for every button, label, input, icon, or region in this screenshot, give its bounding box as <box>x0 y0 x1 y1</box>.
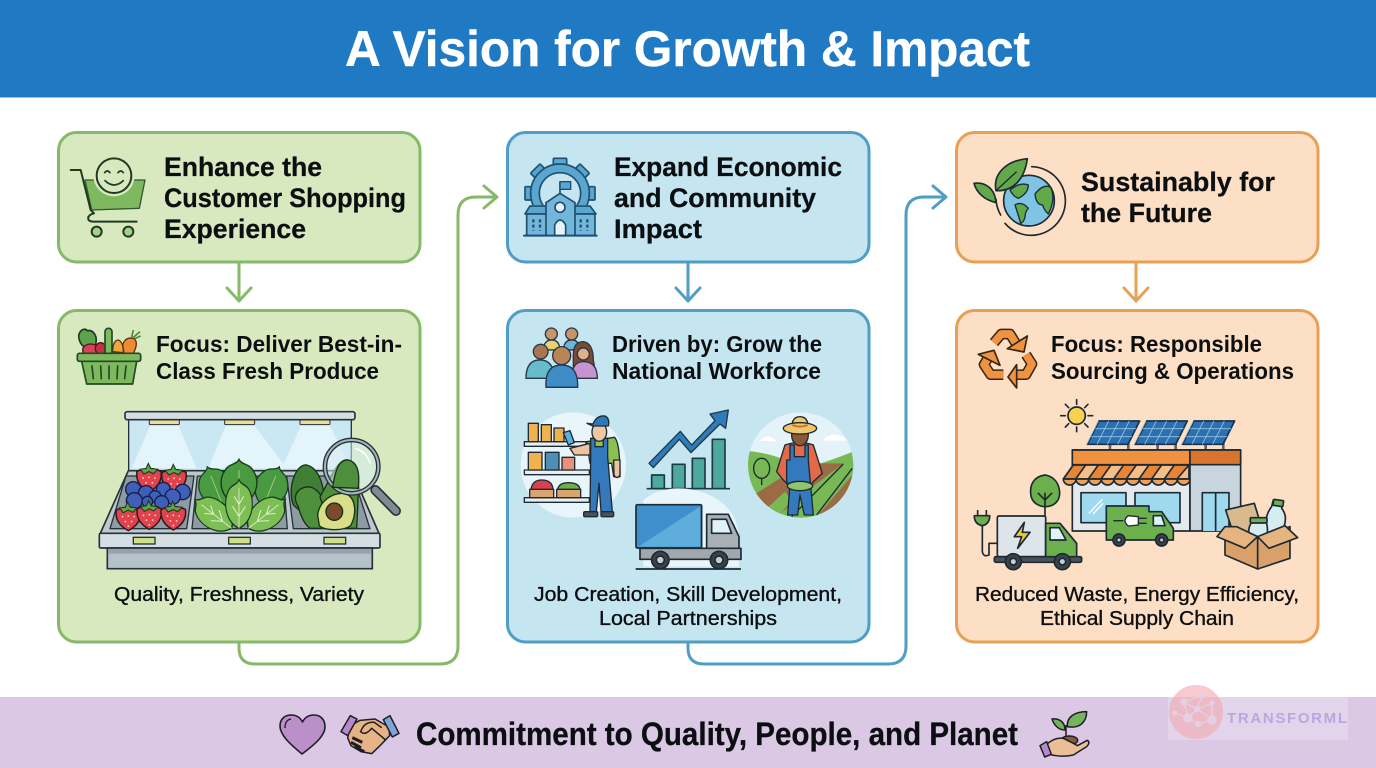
subheading: driven by: National Workforce <box>612 358 821 384</box>
solar panels <box>1087 421 1235 450</box>
caption: responsible: Ethical Supply Chain <box>1040 608 1234 630</box>
heading: enhance: Enhance the <box>164 152 322 182</box>
icon: hand holding seedling <box>1040 712 1089 757</box>
icon: heart <box>280 715 325 754</box>
sun <box>1061 400 1093 432</box>
heading: enhance: Experience <box>164 214 306 244</box>
caption: quality: Quality, Freshness, Variety <box>114 584 364 606</box>
shelf worker <box>521 412 626 518</box>
heading: expand: and Community <box>614 183 816 213</box>
heading: expand: Impact <box>614 214 702 244</box>
subheading: focus responsible <box>1051 331 1294 384</box>
heading: sustainably: Sustainably for <box>1081 167 1275 197</box>
subheading: focus produce: Class Fresh Produce <box>156 358 379 384</box>
panel: enhance customer experience <box>58 132 420 262</box>
icon: produce basket <box>77 328 141 384</box>
strawberries and blueberries <box>116 463 190 531</box>
connector arrow: green to blue <box>239 186 497 664</box>
subheading: focus responsible: Focus: Responsible <box>1051 331 1262 357</box>
caption: responsible: Reduced Waste, Energy Efficiency, <box>975 584 1299 606</box>
watermark: transforml logo <box>1168 685 1348 740</box>
icon: gear and school <box>523 158 598 237</box>
arrow: orange down <box>1124 263 1148 301</box>
growth chart <box>647 410 730 489</box>
heading: enhance: Customer Shopping <box>164 183 406 213</box>
caption: workforce: Local Partnerships <box>599 608 777 630</box>
heading: expand <box>614 152 842 244</box>
footer statement: Commitment to Quality, People, and Planet <box>416 716 1018 752</box>
leafy greens <box>186 459 294 539</box>
tree <box>1031 475 1060 518</box>
panel: expand community impact <box>508 132 869 262</box>
heading: sustainably <box>1081 167 1275 228</box>
connector arrow: blue to orange <box>688 186 946 664</box>
subheading: focus produce: Focus: Deliver Best-in- <box>156 331 402 357</box>
illustration: produce display case <box>99 412 396 569</box>
caption: workforce: Job Creation, Skill Development, <box>534 584 842 606</box>
panel: best-in-class produce <box>58 310 420 642</box>
subheading: driven by <box>612 331 822 384</box>
panel: responsible sourcing <box>956 310 1318 642</box>
icon: handshake <box>341 716 399 754</box>
panel: national workforce <box>508 310 869 642</box>
title: A Vision for Growth & Impact <box>345 21 1030 77</box>
arrow: blue down <box>676 263 700 301</box>
watermark: transforml logo: TRANSFORML <box>1227 710 1347 727</box>
footer banner <box>0 697 1376 768</box>
icon: recycle arrows <box>978 334 1032 388</box>
box with packaging <box>1217 499 1298 569</box>
farmer <box>748 412 854 518</box>
caption: responsible <box>975 584 1299 630</box>
subheading: focus responsible: Sourcing & Operations <box>1051 358 1294 384</box>
subheading: driven by: Driven by: Grow the <box>612 331 822 357</box>
panel: sustainably for the future <box>956 132 1318 262</box>
arrow: green down <box>227 263 251 301</box>
magnifying glass <box>325 440 396 511</box>
subheading: focus produce <box>156 331 402 384</box>
caption: workforce <box>534 584 842 630</box>
avocados <box>291 460 358 530</box>
heading: expand: Expand Economic <box>614 152 842 182</box>
icon: group of people <box>526 328 597 387</box>
heading: sustainably: the Future <box>1081 198 1212 228</box>
green delivery van <box>1106 506 1173 546</box>
electric truck <box>974 510 1082 570</box>
illustration: sustainable store <box>974 400 1298 570</box>
icon: smiling shopping cart <box>71 155 145 237</box>
header banner <box>0 0 1376 98</box>
store building <box>1063 450 1241 531</box>
icon: globe and leaves <box>974 159 1065 235</box>
delivery truck <box>636 488 741 569</box>
heading: enhance <box>164 152 406 244</box>
illustration: workforce scenes <box>521 410 858 569</box>
